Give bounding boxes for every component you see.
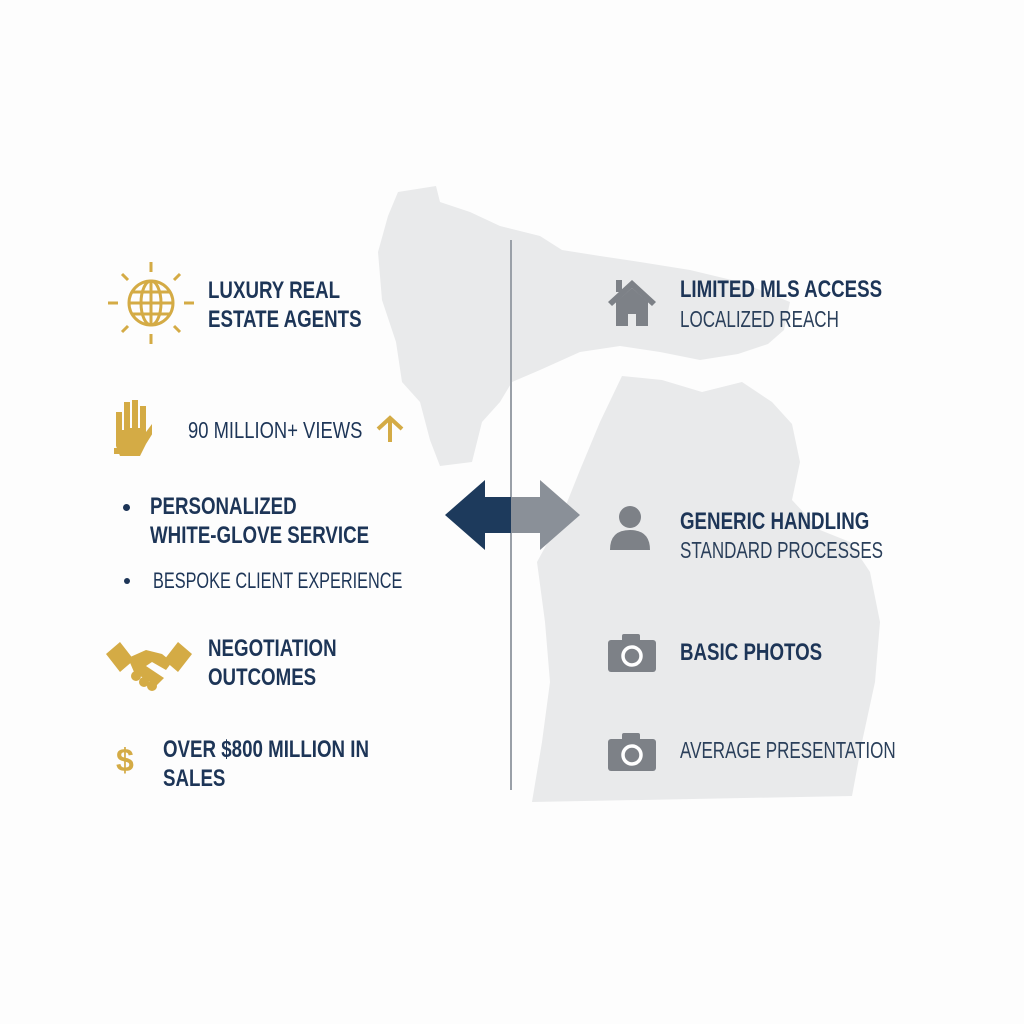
text: 90 million views: 90 MILLION+ VIEWS: [188, 417, 362, 443]
heading: negotiation outcomes: OUTCOMES: [208, 664, 316, 691]
heading: negotiation outcomes: [208, 635, 337, 691]
divider line: [510, 240, 512, 790]
icon: up arrow: [376, 415, 404, 442]
heading: generic handling: GENERIC HANDLING: [680, 508, 869, 535]
heading: basic photos: BASIC PHOTOS: [680, 639, 822, 666]
icon: camera 2: [608, 733, 656, 771]
heading: luxury real estate agents: LUXURY REAL: [208, 277, 340, 304]
icon: dollar: $: [116, 742, 134, 778]
heading: over 800 million: [163, 736, 369, 792]
text: average presentation: AVERAGE PRESENTATION: [680, 737, 896, 763]
icon: house: [608, 280, 656, 326]
icon: camera: [608, 634, 656, 672]
text: localized reach: LOCALIZED REACH: [680, 306, 839, 332]
bullet item: bespoke client experience: BESPOKE CLIENT EXPERIENCE: [153, 568, 402, 593]
icon: sun globe: [108, 262, 194, 344]
double arrow: [445, 480, 580, 550]
heading: over 800 million: SALES: [163, 765, 225, 792]
icon: handshake: [106, 642, 192, 691]
heading: over 800 million: OVER $800 MILLION IN: [163, 736, 369, 763]
bullet item: personalized white-glove service: [123, 493, 369, 549]
bullet item: personalized white-glove service: WHITE-GLOVE SERVICE: [150, 522, 369, 549]
icon: person: [610, 506, 650, 550]
heading: negotiation outcomes: NEGOTIATION: [208, 635, 337, 662]
text: standard processes: STANDARD PROCESSES: [680, 537, 883, 563]
heading: limited mls access: LIMITED MLS ACCESS: [680, 276, 882, 303]
bullet item: personalized white-glove service: PERSONALIZED: [150, 493, 297, 520]
heading: luxury real estate agents: ESTATE AGENTS: [208, 306, 362, 333]
icon: hand: [114, 400, 152, 456]
heading: luxury real estate agents: [208, 277, 362, 333]
